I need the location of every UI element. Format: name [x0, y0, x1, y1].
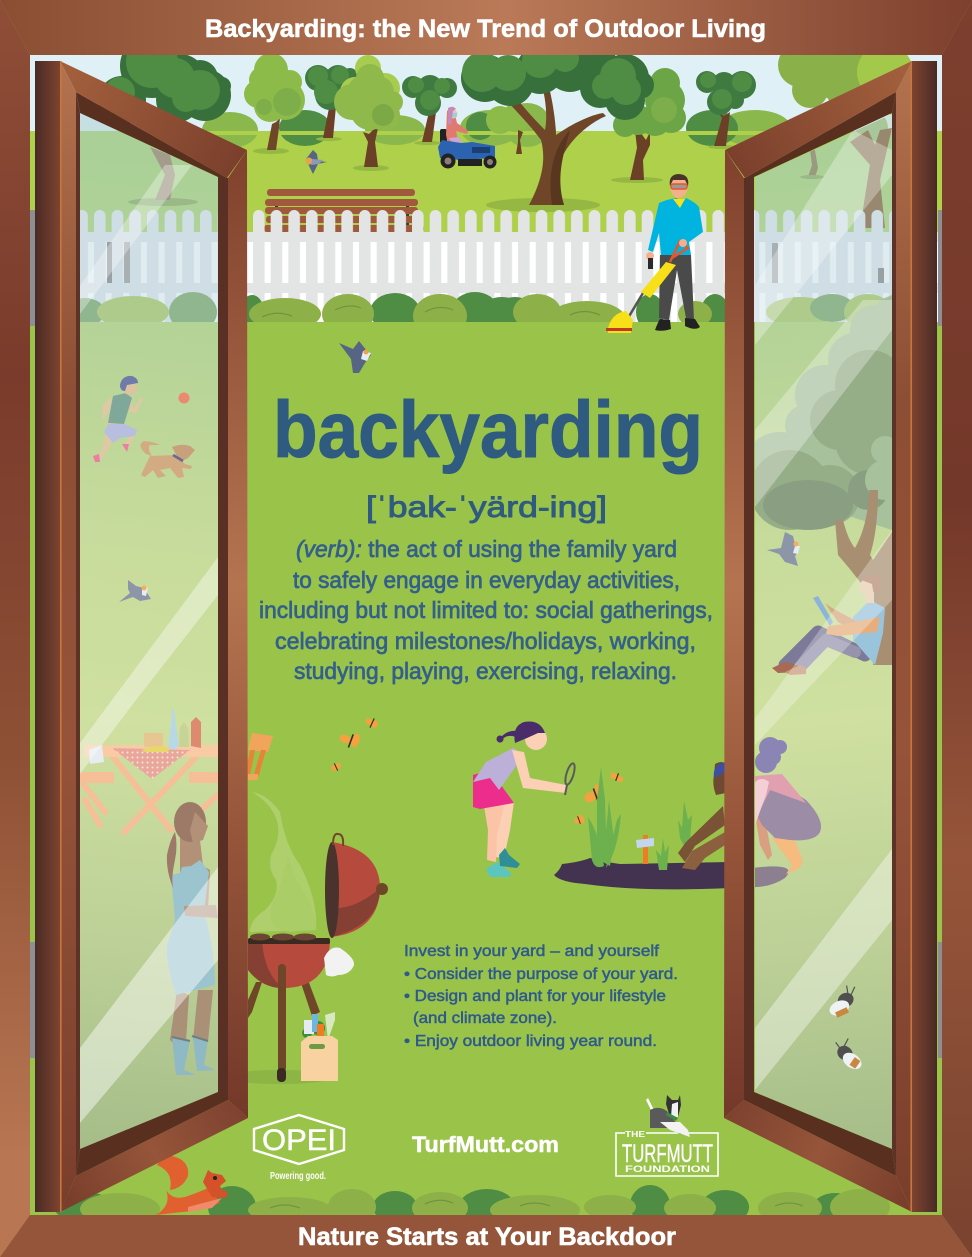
bird seen through glass [119, 580, 151, 602]
phonetic pronunciation: [ˈbak-ˈyärd-ing] [366, 491, 607, 524]
picnic table [74, 709, 229, 832]
boy running [93, 376, 143, 462]
picnic chair [245, 733, 273, 780]
frame: bottom bar [0, 1215, 972, 1257]
fence seen through glass [755, 210, 892, 322]
definition text [259, 536, 713, 684]
OPEI logo [254, 1115, 344, 1182]
right glass pane: view through door [755, 114, 892, 1149]
ball [178, 392, 190, 404]
fence seen through glass [80, 210, 218, 322]
OPEI logo: Powering good. [270, 1171, 326, 1182]
tree: dark tree centre left [402, 75, 457, 145]
bird over lower lawn [339, 341, 371, 373]
hedges seen through glass [80, 292, 217, 322]
upper lawn [0, 131, 972, 241]
bird flying over lawn [306, 150, 327, 174]
frame: top bar [0, 0, 972, 55]
left door frame [35, 61, 248, 1212]
tips text: Invest in your yard – and yourself [404, 943, 660, 960]
hinges [30, 210, 943, 1058]
TurfMutt Foundation logo [616, 1095, 718, 1176]
grocery bag [301, 1012, 338, 1081]
girl with magnifying glass [473, 721, 577, 877]
bird seen through glass [767, 532, 800, 566]
tips text: • Design and plant for your lifestyle [404, 988, 666, 1005]
OPEI logo: OPEI [262, 1124, 336, 1157]
right door frame [724, 61, 937, 1212]
definition text: (verb): the act of using the family yard [296, 536, 677, 562]
tips text: (and climate zone). [413, 1010, 557, 1027]
tree: large dark tree top left [98, 34, 231, 124]
tree: mid green tree [611, 68, 686, 183]
person on ride-on mower [438, 107, 496, 168]
hedges behind lawn [240, 292, 729, 347]
tree: big centre tree [461, 42, 654, 212]
dog on logo [646, 1095, 690, 1137]
trimmer [606, 239, 688, 333]
website text: TurfMutt.com [412, 1132, 559, 1157]
garden bed [554, 767, 730, 889]
white picket fence [30, 210, 942, 322]
frame: left side [0, 0, 30, 1257]
main heading: backyarding: backyarding [273, 385, 703, 474]
tree: lime tree [334, 55, 403, 171]
footer tagline: Nature Starts at Your Backdoor [298, 1223, 676, 1251]
frame: right side [942, 0, 972, 1257]
tips text: • Enjoy outdoor living year round. [404, 1033, 657, 1050]
lower lawn [0, 322, 972, 1222]
left glass pane: view through door [80, 113, 218, 1149]
butterflies [330, 716, 625, 826]
definition text: including but not limited to: social gatherings, [259, 597, 713, 623]
woman in blue dress [167, 802, 218, 1075]
man with string trimmer [606, 174, 703, 333]
tree: right large tree [778, 40, 915, 115]
tree: dark tree centre right [696, 71, 756, 149]
glare bands [80, 165, 218, 1123]
squirrel [156, 1156, 228, 1215]
back hedges [200, 103, 800, 148]
tree trunk [835, 490, 892, 665]
TurfMutt Foundation logo: FOUNDATION [625, 1164, 710, 1175]
barbecue grill [225, 792, 388, 1084]
tree: small dark tree [305, 65, 358, 141]
title: Backyarding: the New Trend of Outdoor Living [205, 15, 766, 43]
TurfMutt Foundation logo: THE [625, 1130, 646, 1139]
gardener head and arms [678, 762, 726, 870]
bench [264, 189, 424, 232]
trees seen through glass [800, 110, 892, 228]
hedges seen through glass [766, 294, 884, 322]
gardener seen through glass [750, 737, 821, 887]
tips text: • Consider the purpose of your yard. [404, 966, 678, 983]
background sky [0, 55, 972, 135]
definition text: to safely engage in everyday activities, [293, 567, 680, 593]
plant: tall leaves [588, 767, 621, 868]
definition text: studying, playing, exercising, relaxing. [294, 658, 677, 684]
dog running [140, 441, 195, 478]
tree: light green tree [244, 53, 305, 154]
reader leaning on tree [772, 575, 885, 675]
definition text: celebrating milestones/holidays, working, [275, 628, 696, 654]
shade tree foliage [755, 295, 892, 530]
bees [830, 986, 862, 1070]
tree seen through glass [128, 147, 198, 206]
garden sign [636, 835, 654, 864]
bottom hedges [54, 1185, 890, 1228]
tips text [404, 943, 678, 1050]
TurfMutt Foundation logo: TURFMUTT [622, 1140, 713, 1168]
glare bands [755, 130, 892, 1090]
